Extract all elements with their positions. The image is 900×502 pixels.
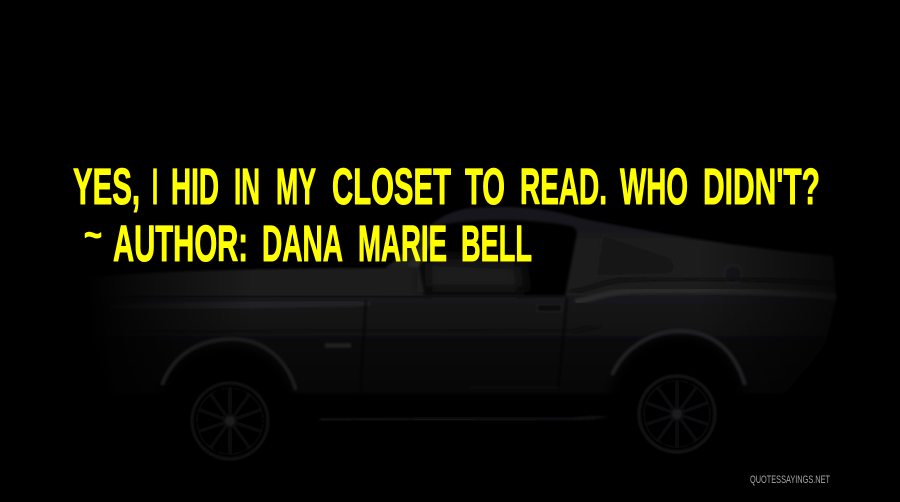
beltline shadow — [130, 296, 565, 297]
door seams — [360, 298, 567, 392]
rear wheel — [639, 376, 715, 452]
front arch rim — [162, 339, 296, 390]
shoulder highlight — [575, 290, 836, 302]
quote text: IN — [234, 158, 260, 215]
door handle — [537, 304, 562, 312]
quote text: DIDN'T? — [703, 158, 820, 215]
rear wheel arch — [600, 335, 750, 460]
badge — [325, 343, 351, 348]
quote text: I — [152, 158, 158, 215]
rocker sill — [320, 416, 612, 420]
author attribution — [84, 214, 532, 272]
rear arch rim — [612, 331, 745, 385]
hood highlight — [110, 302, 370, 308]
watermark: QUOTESSAYINGS.NET — [750, 474, 830, 486]
front wheel arch — [150, 345, 301, 470]
side window — [418, 220, 577, 296]
character line — [130, 326, 600, 333]
author attribution: ~ — [84, 214, 102, 255]
author attribution: MARIE — [358, 215, 447, 272]
quote text: WHO — [620, 158, 688, 215]
quote text: TO — [465, 158, 505, 215]
author attribution: BELL — [461, 215, 532, 272]
illustration: dark car silhouette — [80, 200, 850, 470]
author attribution: AUTHOR: — [113, 215, 248, 272]
car body — [88, 207, 836, 450]
door bottom highlight — [470, 387, 560, 388]
shoulder line — [570, 278, 836, 292]
author attribution: DANA — [262, 215, 343, 272]
quote text — [73, 158, 820, 215]
fuel cap — [724, 265, 742, 283]
vertical fade at car bottom — [80, 300, 850, 460]
quote text: YES, — [73, 158, 140, 215]
quote text: MY — [276, 158, 316, 215]
windshield reflection — [407, 226, 442, 268]
quote text: CLOSET — [332, 158, 451, 215]
horizontal fade at car ends — [80, 200, 850, 460]
quote text: READ. — [520, 158, 607, 215]
window reflection — [425, 258, 525, 292]
front wheel — [192, 383, 268, 459]
quote text: HID — [171, 158, 219, 215]
rear quarter vent — [596, 235, 675, 276]
